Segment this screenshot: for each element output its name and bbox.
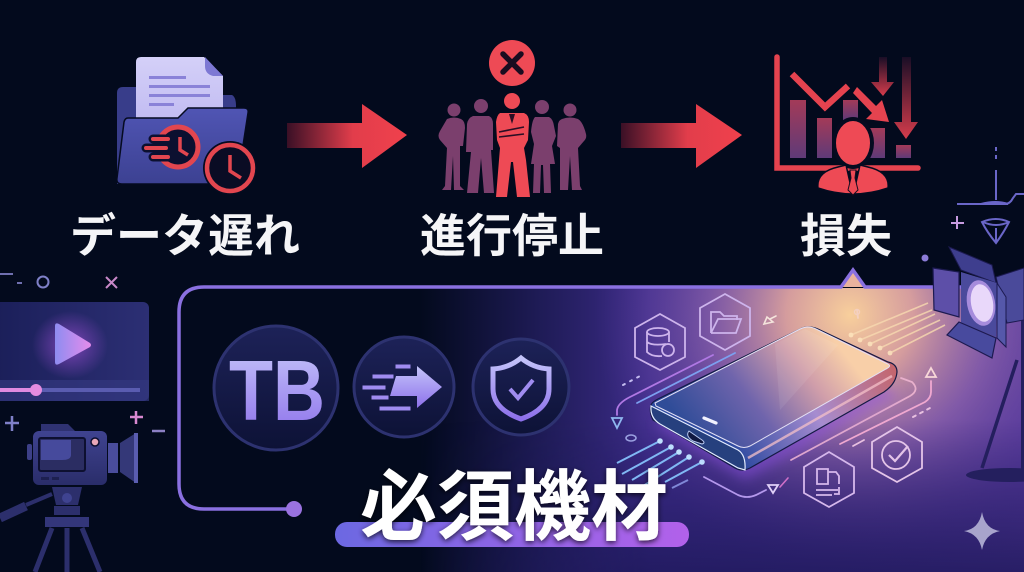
icon: video camera on tripod bbox=[0, 424, 138, 572]
icon: TB capacity badge: TB bbox=[229, 344, 325, 439]
arrow: data delay to halt bbox=[287, 104, 407, 168]
icon: video player bbox=[0, 302, 149, 401]
icon: stopped team bbox=[438, 40, 586, 197]
icon: sparkle bbox=[964, 512, 1000, 550]
icon: external SSD drive bbox=[650, 327, 900, 480]
icon: database hexagon bbox=[635, 314, 685, 370]
icon: folder with delayed data bbox=[117, 57, 257, 195]
icon: security shield badge bbox=[473, 339, 569, 435]
light streaks from port bbox=[617, 438, 705, 488]
title: 必須機材 bbox=[360, 465, 668, 551]
icon: TB capacity badge bbox=[214, 326, 338, 450]
panel: required equipment background bbox=[420, 288, 1024, 572]
light streaks top right of drive bbox=[849, 303, 945, 355]
title underline pill bbox=[335, 522, 689, 547]
decorative plus marks near camera bbox=[5, 411, 165, 431]
icon: folder hexagon bbox=[700, 294, 750, 350]
icon: spotlight on stand bbox=[933, 247, 1024, 482]
icon: checkmark hexagon bbox=[872, 427, 922, 482]
heading: loss: 損失 bbox=[800, 210, 892, 262]
heading: data delay: データ遅れ bbox=[70, 210, 300, 262]
icon: loss chart with person bbox=[777, 57, 918, 200]
decorative marks top left bbox=[0, 274, 117, 288]
decorative line above spotlight bbox=[922, 147, 1024, 262]
panel outline with notch bbox=[179, 270, 1000, 517]
arrow: halt to loss bbox=[621, 104, 742, 168]
icon: document stack hexagon bbox=[804, 452, 854, 507]
heading: progress halt: 進行停止 bbox=[420, 210, 604, 262]
icon: fast transfer badge bbox=[354, 337, 454, 437]
circuit lines around drive bbox=[612, 310, 936, 497]
